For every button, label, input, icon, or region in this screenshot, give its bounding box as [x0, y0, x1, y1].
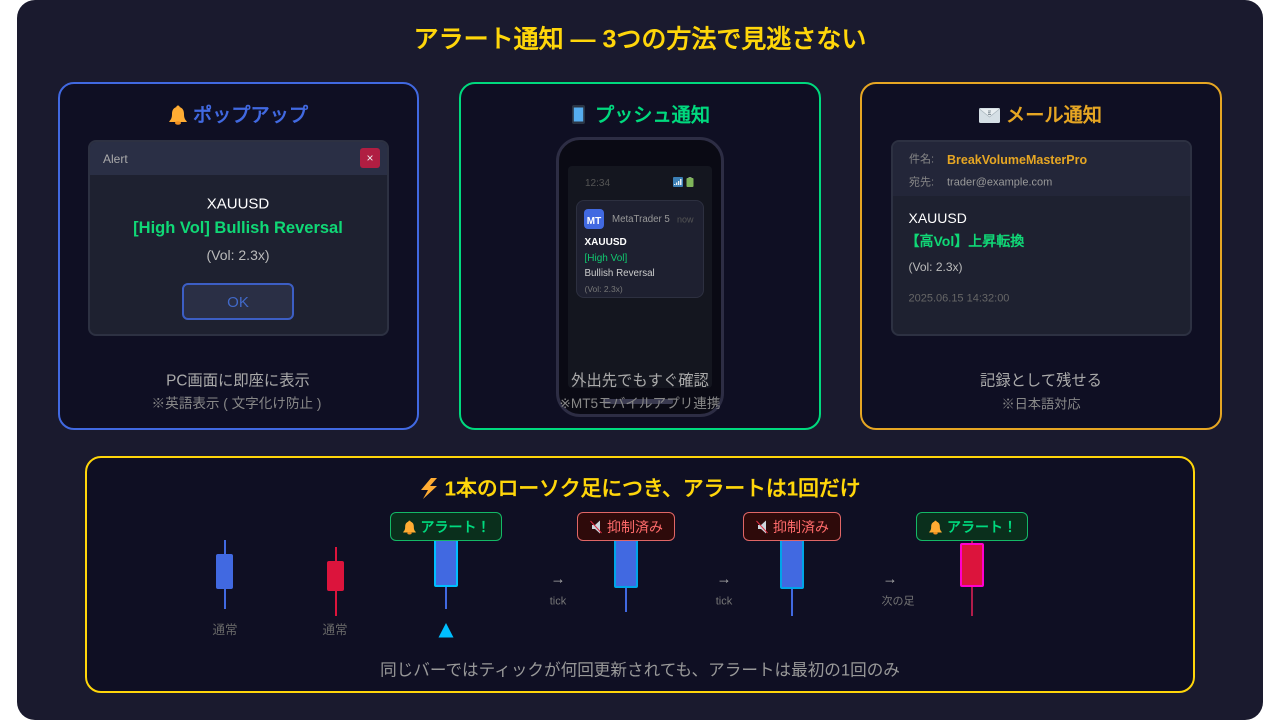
candle 5 suppressed: [780, 541, 804, 616]
icon: lightning bolt: [421, 478, 437, 499]
candle 6 next bar alert: [960, 541, 984, 616]
recipient label: 宛先:: [909, 176, 934, 188]
email volume: (Vol: 2.3x): [908, 260, 963, 274]
signal text: [High Vol] Bullish Reversal: [133, 218, 343, 236]
icon: badge bell 1: [403, 520, 416, 534]
arrow marker: [438, 623, 454, 638]
notification message: Bullish Reversal: [584, 268, 655, 279]
caption: email: 記録として残せる: [980, 372, 1102, 389]
phone screen: [568, 166, 712, 388]
subject label: 件名:: [909, 153, 934, 165]
dialog label: Alert: [103, 152, 128, 166]
notification tag: [High Vol]: [584, 253, 627, 264]
notification card: [576, 200, 704, 298]
volume: (Vol: 2.3x): [206, 247, 270, 263]
badge text: suppressed 1: 抑制済み: [607, 519, 663, 535]
icon: envelope: [979, 108, 1000, 123]
heading: email: メール通知: [1006, 105, 1102, 126]
panel: one alert per candle: [85, 456, 1195, 693]
candle 2 normal bearish: [327, 547, 344, 616]
app icon: MT: [587, 216, 601, 227]
icon: muted speaker 1: [590, 520, 602, 534]
caption: push: 外出先でもすぐ確認: [571, 372, 709, 389]
next bar arrow: →: [882, 570, 898, 588]
label normal 2: 通常: [322, 623, 348, 637]
title: アラート通知 — 3つの方法で見逃さない: [414, 26, 866, 54]
app icon: [584, 209, 604, 229]
heading: popup: ポップアップ: [193, 105, 308, 126]
badge: suppressed 2: [743, 512, 841, 541]
email header: [893, 142, 1190, 196]
icon: bell: [169, 106, 187, 125]
badge: alert 1: [390, 512, 502, 541]
email date: 2025.06.15 14:32:00: [908, 292, 1009, 304]
home bar: [603, 399, 673, 404]
symbol: XAUUSD: [207, 195, 269, 212]
candle 1 normal bullish: [216, 540, 233, 609]
badge: suppressed 1: [577, 512, 675, 541]
badge text: alert 2: アラート！: [947, 519, 1017, 535]
note: popup: ※英語表示 ( 文字化け防止 ): [152, 396, 321, 411]
tick label 2: tick: [716, 596, 732, 608]
notification time: now: [677, 214, 694, 224]
badge: alert 2: [916, 512, 1028, 541]
notification volume: (Vol: 2.3x): [584, 284, 623, 294]
heading: push: プッシュ通知: [595, 105, 710, 126]
next bar label: 次の足: [882, 596, 914, 608]
recipient value: trader@example.com: [947, 176, 1052, 188]
subject value: BreakVolumeMasterPro: [947, 152, 1087, 166]
icon: phone: [572, 105, 585, 124]
badge text: alert 1: アラート！: [420, 519, 490, 535]
label normal 1: 通常: [212, 623, 238, 637]
panel: popup: [58, 82, 419, 430]
note: push: ※MT5モバイルアプリ連携: [560, 396, 720, 411]
tick arrow 1: →: [550, 570, 566, 588]
caption: popup: PC画面に即座に表示: [166, 372, 310, 389]
icon: muted speaker 2: [756, 520, 768, 534]
dialog title bar: [90, 142, 387, 175]
app name: MetaTrader 5: [612, 214, 670, 225]
panel: push: [459, 82, 821, 430]
popup dialog: [88, 140, 389, 336]
icon: badge bell 2: [929, 520, 942, 534]
email signal: 【高Vol】上昇転換: [906, 233, 1024, 249]
close button: [360, 148, 380, 168]
tick label 1: tick: [550, 596, 566, 608]
bottom note: 同じバーではティックが何回更新されても、アラートは最初の1回のみ: [380, 661, 900, 680]
OK button: OK: [227, 294, 249, 311]
heading: one alert per candle: 1本のローソク足につき、アラートは1回だけ: [445, 478, 860, 501]
email symbol: XAUUSD: [908, 210, 967, 226]
icon: signal: [673, 177, 683, 187]
note: email: ※日本語対応: [1001, 396, 1081, 411]
candle 3 alert bar: [434, 541, 458, 609]
phone: [556, 137, 724, 417]
panel: email: [860, 82, 1222, 430]
tick arrow 2: →: [716, 570, 732, 588]
icon: battery: [686, 177, 694, 187]
email window: [891, 140, 1192, 336]
close button: ×: [366, 151, 374, 165]
OK button: [182, 283, 294, 320]
badge text: suppressed 2: 抑制済み: [773, 519, 829, 535]
status time: 12:34: [585, 178, 610, 188]
notification symbol: XAUUSD: [584, 237, 627, 248]
candle 4 suppressed: [614, 541, 638, 612]
